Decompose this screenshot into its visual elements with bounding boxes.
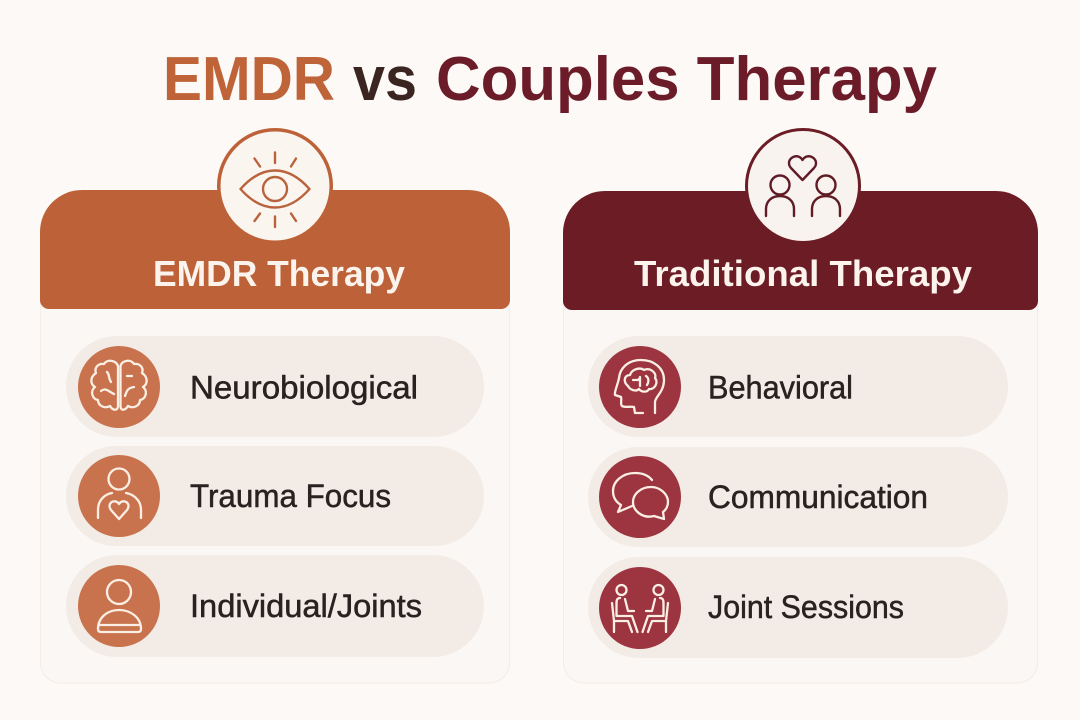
title: EMDR <box>163 45 335 114</box>
header label: Traditional Therapy <box>634 253 973 294</box>
panel: traditional therapy <box>563 128 1038 683</box>
icon: person with heart <box>98 468 141 519</box>
icon: person <box>98 580 141 632</box>
label: Behavioral <box>708 370 853 406</box>
label: Neurobiological <box>190 370 418 406</box>
title <box>163 45 938 114</box>
title: Couples Therapy <box>436 45 938 114</box>
icon: eye badge <box>217 128 333 244</box>
row: Trauma Focus <box>66 446 484 546</box>
icon: brain <box>91 361 147 410</box>
panel body <box>564 280 1038 683</box>
row: Behavioral <box>588 336 1008 437</box>
header label: EMDR Therapy <box>153 253 406 294</box>
panel: EMDR therapy <box>40 128 510 683</box>
panel body <box>40 280 510 683</box>
row: Individual/Joints <box>66 555 484 657</box>
label: Communication <box>708 479 928 515</box>
row: Neurobiological <box>66 336 484 437</box>
icon: head with brain <box>615 360 664 413</box>
label: Individual/Joints <box>190 588 422 624</box>
icon: two people seated <box>612 585 668 632</box>
row: Communication <box>588 447 1008 547</box>
label: Trauma Focus <box>190 478 391 514</box>
header banner <box>563 191 1038 310</box>
title: vs <box>353 45 417 114</box>
header banner <box>40 190 510 309</box>
icon: couple with heart badge <box>745 128 861 244</box>
icon: speech bubbles <box>613 473 668 519</box>
row: Joint Sessions <box>588 557 1008 658</box>
label: Joint Sessions <box>708 589 904 625</box>
